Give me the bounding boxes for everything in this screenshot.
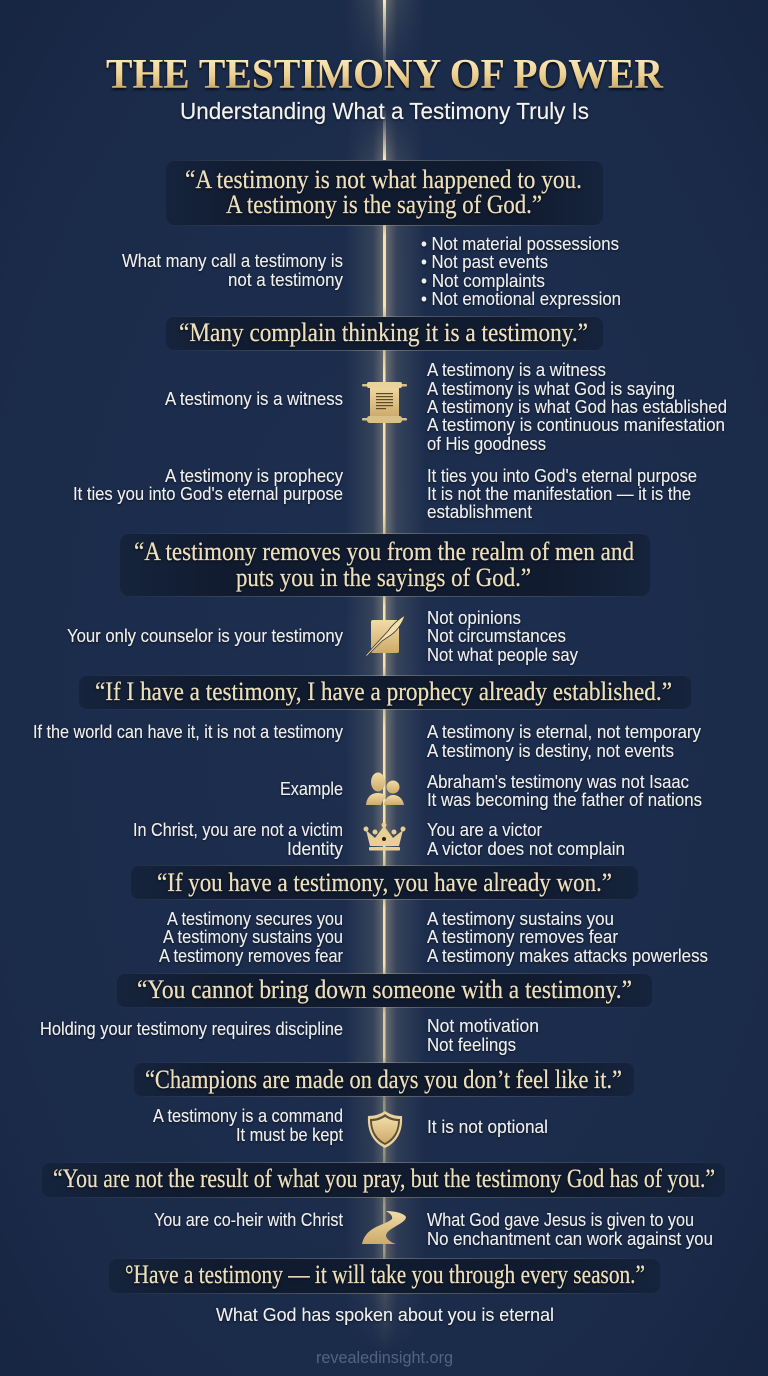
list: abraham xyxy=(427,771,702,810)
list: eternal and destiny: A testimony is destiny, not events xyxy=(427,740,674,761)
text: a testimony is prophecy: It ties you into God's eternal purpose xyxy=(73,483,343,504)
list: co-heir xyxy=(427,1209,713,1249)
text: a testimony is prophecy xyxy=(73,465,344,504)
icon: shield xyxy=(368,1111,402,1148)
list: sustains xyxy=(427,908,708,966)
list: abraham: Abraham's testimony was not Isaac xyxy=(427,771,689,792)
title: THE TESTIMONY OF POWER xyxy=(106,52,664,98)
list: not opinions: Not circumstances xyxy=(427,625,566,646)
quote 4: “If I have a testimony, I have a prophecy already established.” xyxy=(95,677,672,706)
quote 6: “You cannot bring down someone with a testimony.” xyxy=(137,975,632,1004)
central beam of light xyxy=(354,0,416,1339)
list: a testimony is a witness: A testimony is continuous manifestation xyxy=(427,414,725,435)
list: eternal purpose: It is not the manifestation — it is the xyxy=(427,483,691,504)
list: sustains: A testimony makes attacks powerless xyxy=(427,945,708,966)
icon: two people xyxy=(366,772,404,805)
footer url: revealedinsight.org xyxy=(316,1348,453,1367)
text: your only counselor: Your only counselor is your testimony xyxy=(67,625,344,646)
text: co-heir: You are co-heir with Christ xyxy=(154,1209,343,1230)
list: a testimony is a witness xyxy=(427,359,727,454)
text: in christ: Identity xyxy=(287,838,344,859)
text: if the world can have it: If the world can have it, it is not a testimony xyxy=(33,721,344,742)
quote 7: “Champions are made on days you don’t feel like it.” xyxy=(145,1065,622,1094)
text: closing statement: What God has spoken about you is eternal xyxy=(216,1304,554,1325)
list: eternal and destiny: A testimony is eternal, not temporary xyxy=(427,721,702,742)
quote 1: A testimony is the saying of God.” xyxy=(226,190,542,219)
list: not motivation: Not feelings xyxy=(427,1034,516,1055)
list: victor: You are a victor xyxy=(427,819,542,840)
quote 2: “Many complain thinking it is a testimony.” xyxy=(179,318,588,347)
text: what many call a testimony: not a testimony xyxy=(228,269,344,290)
list: eternal purpose xyxy=(427,465,697,522)
text: a command: It must be kept xyxy=(236,1124,343,1145)
text: a command xyxy=(153,1105,343,1145)
quote 3: “A testimony removes you from the realm of men and xyxy=(134,537,634,566)
list: victor: A victor does not complain xyxy=(427,838,625,859)
list: not opinions xyxy=(427,607,579,665)
quote 3: puts you in the sayings of God.” xyxy=(236,563,531,592)
icon: paper and quill xyxy=(365,615,405,656)
list: secures xyxy=(159,908,343,966)
text: a testimony is prophecy: A testimony is prophecy xyxy=(165,465,344,486)
list: not motivation xyxy=(427,1015,539,1055)
list: a testimony is a witness: A testimony is a witness xyxy=(427,359,606,380)
text: not optional: It is not optional xyxy=(427,1116,548,1137)
text: what many call a testimony xyxy=(122,250,344,290)
icon: winding path xyxy=(362,1211,406,1244)
list: eternal and destiny xyxy=(427,721,702,761)
quote 1 xyxy=(166,160,603,226)
list: not a testimony: • Not emotional expression xyxy=(421,288,621,309)
icon: scroll xyxy=(362,382,407,423)
list: secures: A testimony removes fear xyxy=(159,945,343,966)
list: co-heir: What God gave Jesus is given to you xyxy=(427,1209,694,1230)
quote 3 xyxy=(120,533,650,597)
text: in christ xyxy=(133,819,344,859)
list: sustains: A testimony sustains you xyxy=(427,908,614,929)
quote 9: °Have a testimony — it will take you through every season.” xyxy=(125,1260,645,1289)
list: co-heir: No enchantment can work against you xyxy=(427,1228,713,1249)
text: a command: A testimony is a command xyxy=(153,1105,343,1126)
list: a testimony is a witness: A testimony is what God is saying xyxy=(427,378,675,399)
list: a testimony is a witness: of His goodness xyxy=(427,433,546,454)
list: sustains: A testimony removes fear xyxy=(427,926,618,947)
list: not a testimony: • Not material possessions xyxy=(421,233,619,254)
text: discipline: Holding your testimony requires discipline xyxy=(40,1018,343,1039)
icon: crown xyxy=(364,822,406,850)
list: a testimony is a witness: A testimony is what God has established xyxy=(427,396,727,417)
text: in christ: In Christ, you are not a victim xyxy=(133,819,343,840)
list: abraham: It was becoming the father of nations xyxy=(427,789,702,810)
list: victor xyxy=(427,819,625,859)
list: not opinions: Not opinions xyxy=(427,607,521,628)
list: secures: A testimony sustains you xyxy=(163,926,343,947)
text: a testimony is a witness: A testimony is a witness xyxy=(165,388,343,409)
list: not a testimony xyxy=(421,233,621,309)
subtitle: Understanding What a Testimony Truly Is xyxy=(180,98,589,124)
list: eternal purpose: It ties you into God's eternal purpose xyxy=(427,465,697,486)
list: not opinions: Not what people say xyxy=(427,644,579,665)
quote 5: “If you have a testimony, you have already won.” xyxy=(157,868,612,897)
list: secures: A testimony secures you xyxy=(167,908,343,929)
list: not motivation: Not motivation xyxy=(427,1015,539,1036)
list: not a testimony: • Not complaints xyxy=(421,270,545,291)
quote 9 xyxy=(109,1258,660,1294)
quote 1: “A testimony is not what happened to you. xyxy=(185,165,582,194)
text: example: Example xyxy=(280,778,343,799)
list: not a testimony: • Not past events xyxy=(421,251,548,272)
list: eternal purpose: establishment xyxy=(427,501,532,522)
text: what many call a testimony: What many call a testimony is xyxy=(122,250,343,271)
